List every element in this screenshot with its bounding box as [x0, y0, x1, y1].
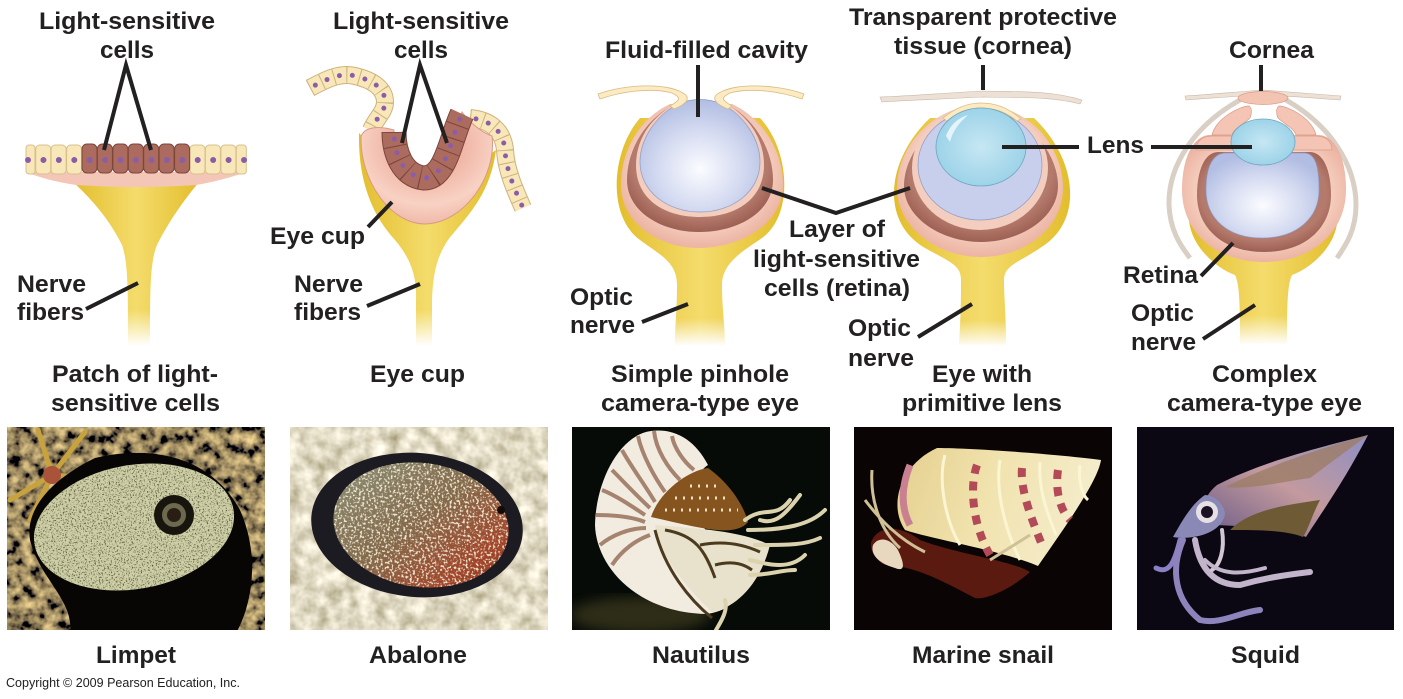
- nerve fibers fan: [73, 182, 199, 345]
- caption: patch of light-sensitive cells: [51, 361, 220, 417]
- beige epithelium chains: [310, 75, 523, 208]
- beige cell row: [26, 145, 246, 174]
- leader: retina: [1201, 243, 1233, 276]
- panel: eye cup diagram: [270, 8, 523, 346]
- label: nerve fibers: [294, 271, 363, 326]
- pale inner ring: [912, 106, 1048, 230]
- optic nerve and yellow sheath: [894, 118, 1070, 345]
- shell stripes: [596, 431, 694, 565]
- optic nerve and yellow sheath: [617, 118, 784, 345]
- caption: eye with primitive lens: [902, 361, 1062, 417]
- hood spots: [665, 486, 738, 510]
- label: abalone: Abalone: [369, 642, 467, 669]
- label: nerve fibers: fibers: [294, 299, 361, 326]
- dark foot: [29, 453, 252, 635]
- label: optic nerve: Optic: [1131, 300, 1194, 327]
- brown retina: [627, 106, 773, 232]
- eye: [1196, 501, 1218, 523]
- leader: optic nerve: [1203, 305, 1255, 339]
- caption: eye cup: Eye cup: [370, 361, 465, 388]
- label: light-sensitive cells: cells: [394, 37, 448, 64]
- label: eye cup: Eye cup: [270, 223, 365, 250]
- brown light-sensitive cells: [394, 114, 462, 178]
- brown hood: [651, 468, 748, 530]
- leader: nerve fibers: [367, 284, 420, 306]
- pink outer layer: [1182, 135, 1346, 262]
- caption: patch of light-sensitive cells: sensitive cells: [51, 390, 220, 417]
- lens: [936, 108, 1026, 186]
- stem fade: [668, 318, 732, 346]
- caption: complex camera-type eye: Complex: [1212, 361, 1318, 388]
- dark mantle ring: [311, 452, 523, 598]
- mantle: [1202, 435, 1368, 537]
- panel: simple pinhole camera-type eye diagram: [570, 37, 809, 346]
- cell nuclei: [26, 157, 247, 163]
- shared callout: lens: Lens: [1087, 132, 1144, 159]
- shared callout: layer of light-sensitive cells (retina): [753, 188, 920, 302]
- pink outer layer: [897, 105, 1063, 257]
- copyright: Copyright © 2009 Pearson Education, Inc.: [6, 675, 240, 690]
- photo: squid: [1137, 427, 1394, 630]
- leader: light-sensitive cells: [104, 65, 151, 150]
- panel: eye with primitive lens diagram: [848, 4, 1117, 372]
- lens: [1231, 119, 1295, 165]
- label: optic nerve: nerve: [570, 312, 635, 339]
- label: cornea: Cornea: [1229, 37, 1315, 64]
- leader: cornea: [1259, 65, 1263, 91]
- photo: marine snail: [854, 427, 1112, 630]
- fluid-filled cavity: [640, 100, 760, 212]
- stem fade: [408, 310, 438, 346]
- label: optic nerve: [848, 315, 914, 372]
- label: transparent protective tissue (cornea): [849, 4, 1117, 60]
- pale inner ring: [636, 104, 764, 217]
- brown retina: [904, 110, 1058, 242]
- transparent protective tissue band: [880, 91, 1082, 104]
- shell: [595, 431, 741, 614]
- caption: simple pinhole camera-type eye: [601, 361, 799, 417]
- shell: [333, 462, 509, 588]
- foot: [871, 529, 1030, 598]
- body: [655, 525, 770, 612]
- leader: optic nerve: [918, 304, 972, 337]
- fluid-filled chamber: [918, 110, 1042, 220]
- yellow nerve: [359, 133, 496, 345]
- beige lid over chamber: [943, 103, 1021, 121]
- caption: patch of light-sensitive cells: Patch of light-: [52, 361, 218, 388]
- shared callout: layer of light-sensitive cells (retina): cells (retina): [764, 275, 910, 302]
- label: light-sensitive cells: cells: [100, 37, 154, 64]
- shared callout: layer of light-sensitive cells (retina): light-sensitive: [753, 246, 920, 273]
- tentacles: [716, 495, 825, 630]
- label: light-sensitive cells: [39, 8, 215, 64]
- leader: optic nerve: [642, 304, 688, 322]
- leader: cornea: [981, 65, 985, 90]
- label: transparent protective tissue (cornea): tissue (cornea): [894, 33, 1072, 60]
- label: fluid-filled cavity: Fluid-filled cavity: [605, 37, 809, 64]
- stem fade: [950, 320, 1014, 347]
- shell pale ribs: [942, 455, 1088, 560]
- caption: eye with primitive lens: primitive lens: [902, 390, 1062, 417]
- arms: [1156, 530, 1310, 621]
- label: optic nerve: [1131, 300, 1196, 356]
- pink eye cup: [361, 112, 493, 224]
- caption: simple pinhole camera-type eye: Simple pinhole: [611, 361, 789, 388]
- starfish: [8, 428, 88, 522]
- photo: limpet: [7, 427, 265, 635]
- eye spot: [154, 495, 194, 535]
- label: optic nerve: nerve: [848, 345, 914, 372]
- label: transparent protective tissue (cornea): Transparent protective: [849, 4, 1117, 31]
- leader: light-sensitive cells: [402, 65, 447, 143]
- light-sensitive brown cells: [82, 144, 190, 173]
- label: nerve fibers: Nerve: [294, 271, 363, 298]
- leader: nerve fibers: [86, 283, 138, 309]
- photo: nautilus: [570, 427, 830, 633]
- label: optic nerve: Optic: [570, 284, 633, 311]
- panel: patch of light-sensitive cells diagram: [17, 8, 247, 346]
- label: nerve fibers: Nerve: [17, 271, 86, 298]
- shared callout: layer of light-sensitive cells (retina): Layer of: [789, 216, 886, 243]
- label: marine snail: Marine snail: [912, 642, 1054, 669]
- label: nerve fibers: fibers: [17, 299, 84, 326]
- cornea band: [1185, 90, 1341, 100]
- label: optic nerve: nerve: [1131, 329, 1196, 356]
- shell cone: [897, 448, 1101, 566]
- caption: simple pinhole camera-type eye: camera-type eye: [601, 390, 799, 417]
- label: light-sensitive cells: Light-sensitive: [333, 8, 509, 35]
- head: [1173, 495, 1225, 538]
- label: nautilus: Nautilus: [652, 642, 750, 669]
- caption: complex camera-type eye: [1167, 361, 1362, 417]
- body dark bands: [655, 530, 760, 618]
- pink outer layer: [621, 104, 783, 248]
- outer pale lids: [1169, 100, 1356, 258]
- label: limpet: Limpet: [96, 642, 176, 669]
- label: light-sensitive cells: Light-sensitive: [39, 8, 215, 35]
- lens highlight: [946, 115, 968, 142]
- label: retina: Retina: [1123, 262, 1199, 289]
- leader: fluid-filled cavity: [696, 65, 700, 117]
- caption: complex camera-type eye: camera-type eye: [1167, 390, 1362, 417]
- caption: eye with primitive lens: Eye with: [932, 361, 1032, 388]
- label: squid: Squid: [1231, 642, 1300, 669]
- stem fade: [1232, 315, 1296, 345]
- label: nerve fibers: [17, 271, 86, 326]
- optic nerve and yellow sheath: [1189, 205, 1338, 345]
- label: light-sensitive cells: [333, 8, 509, 64]
- label: optic nerve: [570, 284, 635, 339]
- cornea lens cover: [1238, 92, 1288, 104]
- photo: abalone: [290, 427, 548, 630]
- fluid-filled chamber: [1206, 153, 1319, 238]
- panel: complex camera-type eye diagram: [1123, 37, 1356, 356]
- brown retina: [1197, 152, 1331, 252]
- leader: eye cup: [368, 202, 392, 227]
- shell: [34, 464, 234, 590]
- antennae: [865, 470, 1030, 560]
- opening lips: [598, 86, 804, 109]
- stem fade: [120, 310, 160, 346]
- iris arms: [1196, 106, 1332, 152]
- mantle fin: [1230, 500, 1320, 537]
- shell red bands: [973, 465, 1070, 555]
- label: optic nerve: Optic: [848, 315, 911, 342]
- pink tissue base: [26, 172, 247, 187]
